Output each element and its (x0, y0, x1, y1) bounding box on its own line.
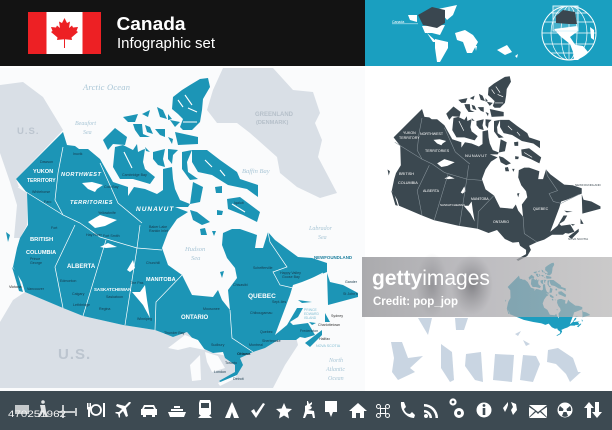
icon: car (141, 405, 157, 417)
city labels: Saskatoon (106, 295, 123, 299)
city labels: St John's (343, 292, 358, 296)
icon: up and down arrows (584, 402, 602, 418)
icon: radiation (558, 402, 572, 418)
city labels: Charlottetown (318, 323, 340, 327)
city labels: Iqaluit (234, 201, 244, 205)
panel: icon bar (0, 391, 612, 430)
world map: Canada (392, 20, 404, 24)
city labels: Ottawa (237, 351, 251, 356)
dark map labels: ALBERTA (423, 189, 440, 193)
region labels: MANITOBA (146, 277, 176, 283)
city labels: Sherbrooke (262, 339, 281, 343)
city labels: Chibougamau (250, 311, 272, 315)
city labels: Prince (30, 257, 40, 261)
city labels: Lethbridge (73, 303, 90, 307)
icon: phone (401, 402, 415, 418)
city labels: London (214, 370, 226, 374)
sea and country labels: North (328, 358, 343, 364)
icon: map marker note (325, 401, 337, 417)
dark map labels: TERRITORY (399, 136, 420, 140)
mini teal map (505, 263, 590, 336)
sea and country labels: Baffin Bay (242, 168, 270, 175)
dark map labels: NUNAVUT (465, 153, 488, 158)
city labels: Edmonton (60, 279, 76, 283)
city labels: Moosonee (203, 307, 220, 311)
sea and country labels: U.S. (58, 346, 91, 363)
city labels: Halifax (319, 337, 330, 341)
province silhouettes (391, 318, 581, 382)
header: black title band (0, 0, 365, 66)
city labels: Toronto (225, 361, 237, 365)
icon: mail (529, 405, 547, 418)
dark map labels: BRITISH (399, 172, 414, 176)
Alaska landmass (0, 82, 63, 238)
sea and country labels: Arctic Ocean (82, 82, 130, 92)
icon: gears (450, 400, 462, 416)
city labels: Faro (44, 200, 51, 204)
icon: bus (15, 405, 29, 414)
city labels: Sudbury (211, 343, 225, 347)
image id text: 470251962 (8, 409, 66, 420)
city labels: Detroit (233, 377, 244, 381)
city labels: Chisasibi (233, 283, 248, 287)
city labels: Fort Smith (103, 234, 120, 238)
icon: home (349, 403, 367, 418)
dark map labels: TERRITORIES (425, 149, 450, 153)
icon: command key (376, 404, 390, 418)
city labels: Colo Bay (104, 185, 119, 189)
icon: Canadian flag (28, 12, 101, 54)
sea and country labels: Labrador (308, 226, 333, 232)
city labels: Vancouver (27, 287, 45, 291)
region labels: BRITISH (30, 237, 53, 243)
icon: rss (424, 404, 438, 418)
watermark credit: Credit: pop_jop (373, 296, 458, 308)
city labels: Baker Lake (149, 225, 167, 229)
sea and country labels: Sea (318, 235, 327, 241)
province borders (18, 147, 323, 352)
sea and country labels: GREENLAND (255, 112, 294, 118)
city labels: The Pas (130, 281, 144, 285)
city labels: Sept-Iles (272, 300, 286, 304)
region labels: ALBERTA (67, 264, 96, 270)
icon: check (251, 403, 265, 418)
region labels (26, 169, 352, 348)
Greenland landmass (207, 68, 337, 198)
city labels: Cambridge Bay (122, 173, 147, 177)
city labels: Sydney (331, 314, 343, 318)
city labels: Churchill (146, 261, 160, 265)
dark map labels: ONTARIO (493, 220, 509, 224)
dark map labels: NEWFOUNDLAND (575, 183, 602, 187)
city labels: Regina (99, 307, 110, 311)
dark map labels: MANITOBA (471, 197, 489, 201)
city labels: George (30, 261, 42, 265)
icon: hiker (38, 400, 48, 417)
sea and country labels: Sea (191, 255, 200, 262)
dark map labels: NOVA SCOTIA (568, 237, 588, 241)
sea and country labels: Hudson (184, 246, 205, 253)
icon: deer (303, 401, 315, 418)
dark map labels: QUEBEC (533, 207, 549, 211)
city labels: Whitehorse (32, 190, 50, 194)
United States landmass (0, 292, 298, 388)
city labels: Goose Bay (282, 275, 300, 279)
city labels (9, 152, 358, 381)
region labels: YUKON (33, 169, 53, 175)
city labels: Victoria (9, 285, 22, 289)
watermark logo text: gettyimages (372, 267, 490, 290)
region labels: NUNAVUT (136, 206, 174, 213)
city labels: Schefferville (253, 266, 273, 270)
region labels: NOVA SCOTIA (316, 344, 341, 348)
region labels: PRINCE (304, 308, 318, 312)
city labels: Quebec (260, 330, 273, 334)
region labels: NEWFOUNDLAND (314, 255, 352, 260)
region labels: ISLAND (304, 316, 317, 320)
city labels: Fredericton (300, 329, 318, 333)
icon: train (198, 400, 212, 418)
city labels: Gander (345, 280, 358, 284)
region labels: EDWARD (304, 312, 319, 316)
panel: main map of Canada (0, 68, 365, 391)
icon: globe (503, 402, 517, 415)
Canada landmass (6, 78, 358, 383)
region labels: QUEBEC (248, 293, 276, 300)
icon: info (476, 402, 492, 418)
subtitle: Infographic set (117, 36, 215, 52)
Great Lakes (168, 335, 237, 386)
lakes and inlets (82, 95, 245, 318)
city labels: Hay River (86, 233, 103, 237)
region labels: NORTHWEST (61, 172, 102, 178)
sea and country labels: U.S. (17, 126, 39, 137)
sea and country labels: Ocean (328, 376, 344, 382)
region labels: COLUMBIA (26, 250, 56, 256)
icon: signpost (58, 405, 77, 418)
region labels: ONTARIO (181, 315, 209, 321)
icon: tent (225, 402, 239, 418)
icon: cutlery (87, 403, 105, 417)
dark landmass (388, 76, 600, 261)
icon: star (276, 403, 292, 418)
city labels: Inuvik (73, 152, 83, 156)
globe locator (542, 6, 596, 60)
sea and country labels: (DENMARK) (256, 120, 288, 126)
title: Canada (116, 14, 187, 34)
icon: ship (168, 406, 186, 417)
region labels: SASKATCHEWAN (94, 287, 131, 292)
city labels: Yellowknife (98, 211, 116, 215)
sea and country labels: Beaufort (75, 120, 96, 127)
city labels: Calgary (72, 292, 85, 296)
city labels: Montreal (249, 343, 263, 347)
panel: world locator band (365, 0, 612, 66)
dark map labels: NORTHWEST (420, 132, 444, 136)
sea and country labels: Sea (83, 130, 92, 136)
sea and country labels (17, 82, 345, 382)
city labels: Thunder Bay (164, 331, 185, 335)
dark map labels: COLUMBIA (398, 181, 418, 185)
city labels: Dawson (40, 160, 53, 164)
region labels: TERRITORIES (70, 200, 113, 206)
dark map labels (398, 131, 602, 241)
city labels: Fort (51, 226, 57, 230)
sea and country labels: Atlantic (325, 367, 345, 373)
city labels: Happy Valley (280, 271, 301, 275)
panel: provinces and mini map (391, 263, 590, 382)
dark map labels: SASKATCHEWAN (440, 203, 465, 207)
icon: plane (115, 402, 131, 418)
dark map labels: YUKON (403, 131, 416, 135)
watermark band (362, 253, 612, 317)
world map (392, 5, 518, 62)
region labels: TERRITORY (27, 178, 56, 184)
city labels: Winnipeg (137, 317, 152, 321)
city labels: Rankin Inlet (149, 229, 168, 233)
panel: dark Canada map (388, 76, 602, 261)
